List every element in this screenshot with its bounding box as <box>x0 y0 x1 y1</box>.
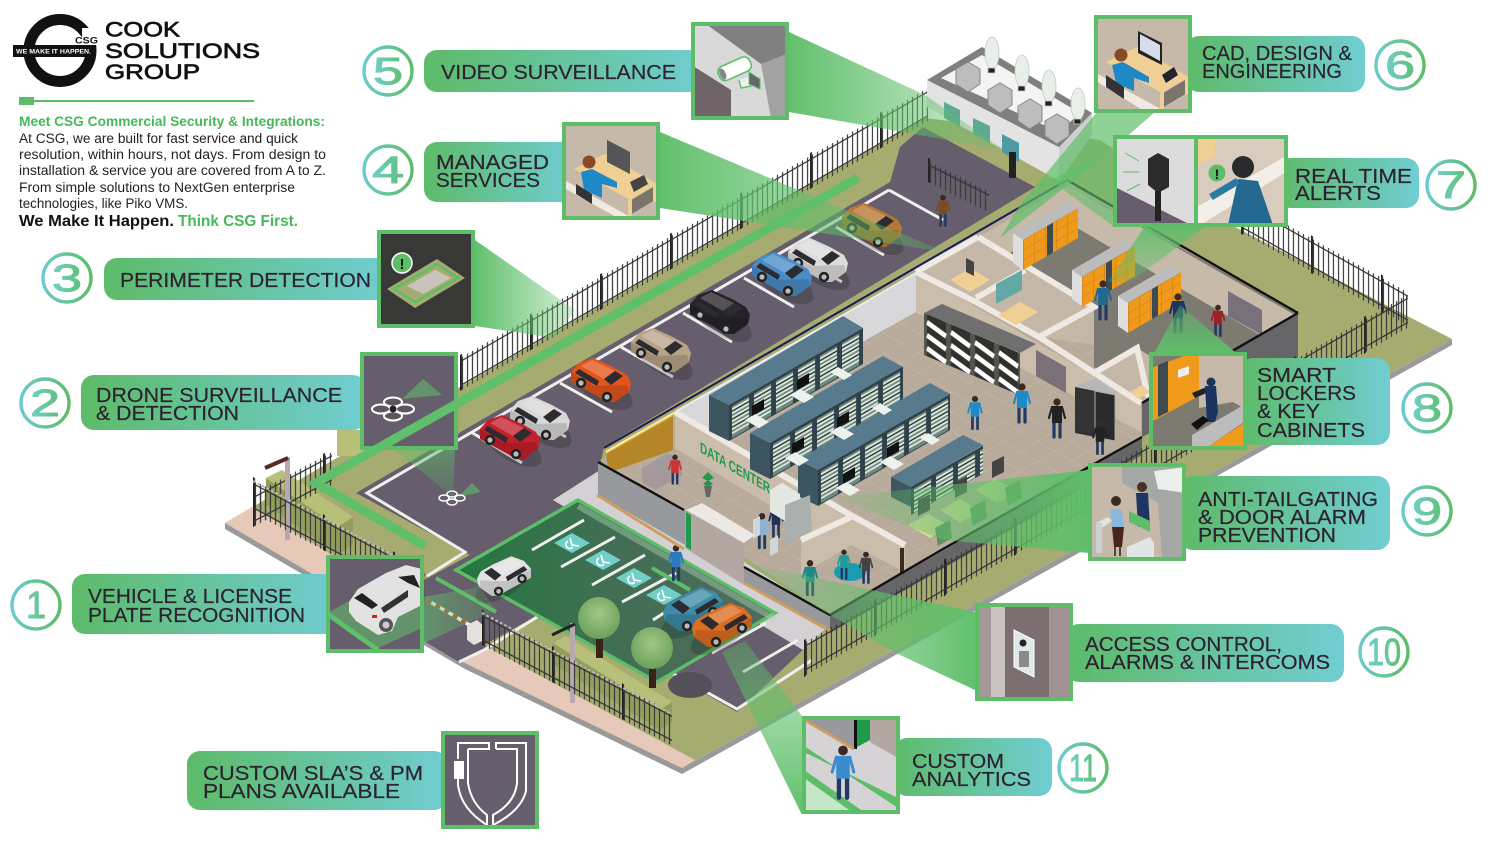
beam: drone <box>395 450 455 497</box>
label pill 11 <box>894 738 1052 796</box>
grass inside front fence <box>484 607 737 760</box>
badge 2: 2 <box>30 383 60 425</box>
interior walls <box>675 237 1148 545</box>
beam: real time alerts camera <box>1050 150 1113 226</box>
panel 2: drone <box>360 352 458 450</box>
label pill 8: & KEY <box>1257 401 1320 423</box>
front fences <box>253 291 1408 746</box>
callout 8: smart lockers <box>1149 352 1451 450</box>
badge 3 <box>43 254 91 302</box>
beam: managed services <box>660 132 945 252</box>
intro text block: We Make It Happen. <box>19 213 174 230</box>
office desks <box>834 258 1150 581</box>
panel 10: intercom <box>975 603 1073 701</box>
label pill sla: PLANS AVAILABLE <box>203 781 400 803</box>
panel 7: alert sensor and person <box>1113 135 1288 227</box>
hvac units <box>956 62 1069 144</box>
perimeter fences behind <box>253 85 1408 527</box>
label pill 6 <box>1186 36 1365 92</box>
exterior lower walls <box>830 313 1298 633</box>
badge 6 <box>1376 41 1424 89</box>
connector beams <box>395 32 1235 815</box>
callout 10: access control <box>975 603 1408 701</box>
badge 5 <box>364 47 412 95</box>
intro text block: From simple solutions to NextGen enterprise <box>19 180 295 195</box>
label pill 5: VIDEO SURVEILLANCE <box>441 62 676 84</box>
badge 3: 3 <box>52 258 82 300</box>
rooftop equipment building <box>927 37 1092 181</box>
badge 8 <box>1403 384 1451 432</box>
beam: cad design <box>1000 112 1155 238</box>
entry barrier and poles <box>265 457 575 703</box>
label pill 6: CAD, DESIGN & <box>1202 43 1353 65</box>
intro text block: technologies, like Piko VMS. <box>19 196 188 211</box>
badge 10: 10 <box>1367 632 1401 674</box>
intro text block <box>19 113 326 230</box>
label pill 5 <box>424 50 704 92</box>
server rack rows <box>709 316 983 515</box>
badge 5: 5 <box>373 51 403 93</box>
label pill 8: CABINETS <box>1257 420 1365 442</box>
security turnstiles <box>753 483 812 556</box>
label pill sla: CUSTOM SLA’S & PM <box>203 763 423 785</box>
intro text block: Meet CSG Commercial Security & Integrations: <box>19 113 325 129</box>
reception alcove wall <box>606 415 673 473</box>
divider <box>19 97 254 105</box>
badge 6: 6 <box>1385 45 1415 87</box>
label pill 9: ANTI-TAILGATING <box>1198 489 1378 511</box>
badge 11 <box>1059 744 1107 792</box>
logo: CSG <box>75 36 98 46</box>
label pill 8: LOCKERS <box>1257 383 1356 405</box>
label pill 3 <box>104 258 389 300</box>
callout 1: vehicle recognition <box>12 555 424 653</box>
parking lines <box>367 190 943 709</box>
label pill 11: ANALYTICS <box>912 769 1031 791</box>
badge 7 <box>1427 161 1475 209</box>
smart locker banks <box>1013 202 1181 333</box>
label pill 4: MANAGED <box>436 152 549 174</box>
badge 8: 8 <box>1412 388 1442 430</box>
logo: WE MAKE IT HAPPEN. <box>16 49 91 56</box>
callout 6: cad design <box>1094 15 1424 113</box>
trees <box>578 597 712 698</box>
accessible parking zone <box>436 500 775 682</box>
beam: smart lockers <box>1155 305 1235 352</box>
panel: shield icon <box>441 731 539 829</box>
callout 4: managed services <box>364 122 660 220</box>
windows in locker hall <box>1228 291 1262 335</box>
green perimeter path <box>316 178 858 546</box>
intro text block: At CSG, we are built for fast service and quick <box>19 131 298 146</box>
front exterior wall and entrance <box>597 180 1298 631</box>
locker hall floor <box>978 185 1298 398</box>
panel 3: mini site map <box>377 230 475 328</box>
open cabling racks <box>924 304 1118 441</box>
label pill sla <box>187 751 447 810</box>
beam: real time alerts person <box>1108 226 1206 282</box>
ground and lawn <box>225 118 1452 774</box>
callout: custom sla <box>187 731 539 829</box>
label pill 9 <box>1180 476 1390 550</box>
badge 4: 4 <box>372 150 404 192</box>
label pill 8 <box>1240 358 1390 445</box>
badge 9: 9 <box>1412 491 1442 533</box>
badge 1 <box>12 581 60 629</box>
label pill 3: PERIMETER DETECTION <box>120 270 371 292</box>
label pill 2 <box>81 375 366 430</box>
people <box>669 195 1224 595</box>
badge 7: 7 <box>1436 165 1466 207</box>
intro text block: resolution, within hours, not days. From design to <box>19 147 326 162</box>
callout 2: drone surveillance <box>21 352 458 450</box>
label pill 1: VEHICLE & LICENSE <box>88 586 292 608</box>
panel 5: camera <box>691 22 789 120</box>
callout 3: perimeter detection <box>43 230 475 328</box>
label pill 10: ALARMS & INTERCOMS <box>1085 652 1330 674</box>
beam: custom analytics <box>722 641 802 815</box>
label pill 7: REAL TIME <box>1295 166 1412 188</box>
callout 5: video surveillance <box>364 22 789 120</box>
panel 7: alert sensor and person: ! <box>1215 166 1219 182</box>
drone in flight <box>439 483 481 505</box>
label pill 7 <box>1278 158 1419 208</box>
potted plant <box>702 472 714 497</box>
callout 7: real time alerts <box>1113 135 1475 227</box>
label pill 1: PLATE RECOGNITION <box>88 605 305 627</box>
beam: access control <box>745 563 975 690</box>
hedges <box>266 470 672 730</box>
rooftop turbines <box>985 37 1085 124</box>
panel 4: operator <box>562 122 660 220</box>
label pill 7: ALERTS <box>1295 183 1381 205</box>
panel 9: people at turnstile <box>1088 463 1186 561</box>
label pill 1 <box>72 574 340 634</box>
label pill 10 <box>1066 624 1344 682</box>
reception sofa <box>642 453 682 490</box>
intro text block: installation & service you are covered from A to Z. <box>19 163 326 178</box>
beam: video surveillance <box>789 32 1005 150</box>
label pill 10: ACCESS CONTROL, <box>1085 634 1282 656</box>
logo: GROUP <box>105 61 200 84</box>
label pill 9: & DOOR ALARM <box>1198 507 1366 529</box>
parked cars <box>470 203 910 663</box>
offices <box>916 237 1025 298</box>
label pill 4 <box>424 142 574 202</box>
data center sign: DATA CENTER <box>700 439 770 498</box>
logo <box>13 18 260 84</box>
label pill 2: & DETECTION <box>96 403 239 425</box>
intro text block: Think CSG First. <box>178 213 298 230</box>
badge 9 <box>1403 487 1451 535</box>
label pill 6: ENGINEERING <box>1202 61 1342 83</box>
badge 11: 11 <box>1069 748 1097 790</box>
label pill 11: CUSTOM <box>912 751 1004 773</box>
badge 1: 1 <box>26 585 46 627</box>
building floor plan <box>597 180 1298 633</box>
meeting room <box>801 517 905 575</box>
label pill 9: PREVENTION <box>1198 525 1336 547</box>
lobby wall with sign <box>675 413 847 552</box>
beam: anti-tailgating <box>836 470 1089 553</box>
panel 1: car <box>326 555 424 653</box>
callout 11: custom analytics <box>802 716 1107 814</box>
beam: license plate <box>424 587 496 643</box>
panel 3: mini site map: ! <box>400 256 404 273</box>
beam: perimeter detection <box>475 240 575 338</box>
label pill 4: SERVICES <box>436 170 540 192</box>
sidewalk <box>553 470 835 650</box>
label pill 2: DRONE SURVEILLANCE <box>96 385 342 407</box>
server room walls <box>676 272 916 430</box>
logo: SOLUTIONS <box>105 40 260 63</box>
panel 11: pedestrian <box>802 716 900 814</box>
panel 6: designer <box>1094 15 1192 113</box>
label pill 8: SMART <box>1257 365 1336 387</box>
badge 4 <box>364 146 412 194</box>
panel 8: lockers <box>1149 352 1247 450</box>
logo: COOK <box>105 18 180 42</box>
badge 2 <box>21 379 69 427</box>
callout 9: anti-tailgating <box>1088 463 1451 561</box>
road and parking asphalt <box>356 127 1035 712</box>
isometric site <box>225 37 1452 774</box>
